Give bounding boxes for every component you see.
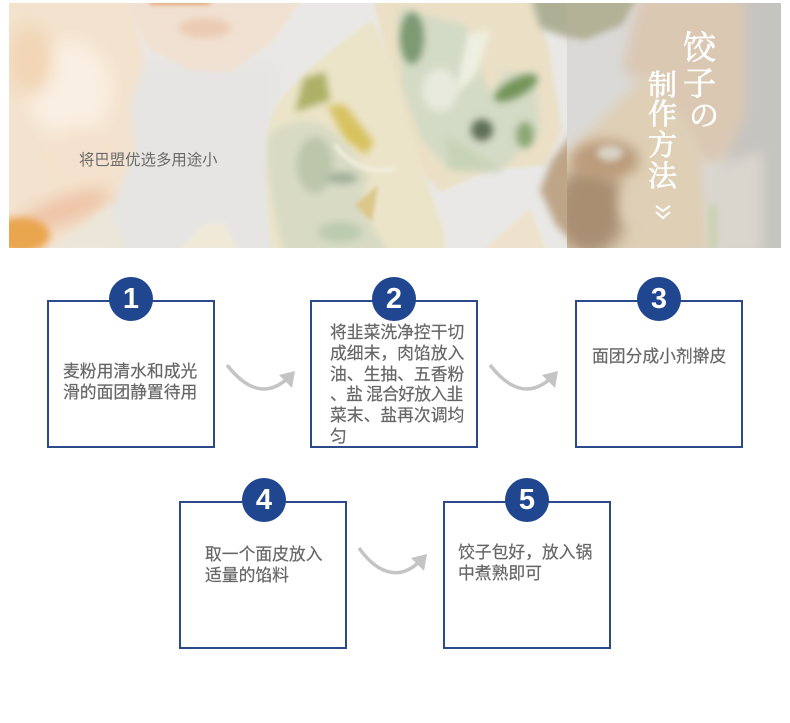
- title glyph column right: の: [689, 100, 719, 133]
- bottom center cream dumpling: [484, 209, 546, 248]
- step 1 text: 麦粉用清水和成光: [63, 362, 197, 381]
- right green dumpling: [372, 0, 562, 192]
- step 2 box: [310, 300, 478, 448]
- step 4 text: [205, 545, 322, 585]
- step 3 box: [575, 300, 743, 448]
- title glyph column right: 饺: [683, 31, 716, 67]
- title glyph column right: 子: [683, 67, 716, 103]
- title glyph column left: 作: [648, 99, 677, 131]
- step 1: [47, 277, 215, 448]
- step 5 number badge: 5: [519, 484, 535, 516]
- arrow 2 to 3: [488, 364, 558, 391]
- step 2 text: 、盐 混合好放入韭: [330, 385, 463, 404]
- step 3 number badge: [637, 277, 681, 321]
- title glyph column left: 法: [648, 161, 677, 193]
- title glyph column right: [683, 30, 719, 133]
- step 2 text: 菜末、盐再次调均: [330, 406, 464, 425]
- step 1 number badge: 1: [123, 283, 139, 315]
- step 5 number badge: [505, 478, 549, 522]
- icon: double chevron down: [656, 205, 670, 220]
- step 4 number badge: [242, 478, 286, 522]
- arrow 1 to 2: [226, 364, 295, 391]
- caption text: 将巴盟优选多用途小: [79, 152, 218, 169]
- arrow 4 to 5: [358, 547, 427, 574]
- step 4 text: 取一个面皮放入: [205, 545, 322, 564]
- step 1 text: 滑的面团静置待用: [63, 383, 197, 402]
- left blurred dumpling: [9, 3, 146, 248]
- step 4 number badge: 4: [256, 484, 272, 516]
- title glyph column left: 方: [648, 130, 677, 162]
- top blurred dumpling: [132, 3, 300, 72]
- step 4 text: 适量的馅料: [205, 566, 289, 585]
- step 1 text: [63, 362, 197, 402]
- photo left part: [9, 3, 567, 248]
- title glyph column left: 制: [648, 70, 677, 102]
- step 1 box: [47, 300, 215, 448]
- title glyph column left: [648, 70, 677, 193]
- central green dumpling: [266, 20, 445, 255]
- step 5 box: [443, 501, 611, 649]
- top back dumpling: [528, 3, 567, 42]
- brown dumpling left of seam: [536, 133, 567, 243]
- step 2 number badge: [372, 277, 416, 321]
- step 2 number badge: 2: [386, 283, 402, 315]
- step 2 text: 成细末，肉馅放入: [330, 344, 464, 363]
- step 5 text: 饺子包好，放入锅: [458, 543, 592, 562]
- step 3 text: 面团分成小剂擀皮: [592, 347, 726, 366]
- step 2: [310, 277, 478, 448]
- step 2 text: 将韭菜洗净控干切: [330, 323, 464, 342]
- step 2 text: [330, 323, 464, 446]
- step 5 text: 中煮熟即可: [458, 564, 542, 583]
- bottom small dumpling: [184, 224, 234, 248]
- step 1 number badge: [109, 277, 153, 321]
- step 4 box: [179, 501, 347, 649]
- title: dumpling making method: [648, 30, 719, 220]
- step 4: [179, 478, 347, 649]
- step 2 text: 油、生抽、五香粉: [330, 365, 464, 384]
- hero photo: dumplings: [9, 3, 781, 248]
- step 3: [575, 277, 743, 448]
- hero banner: [9, 3, 781, 248]
- step 5 text: [458, 543, 592, 583]
- photo right darker panel: [567, 3, 781, 248]
- step 3 number badge: 3: [651, 283, 667, 315]
- step 5: [443, 478, 611, 649]
- step 2 text: 匀: [330, 427, 347, 446]
